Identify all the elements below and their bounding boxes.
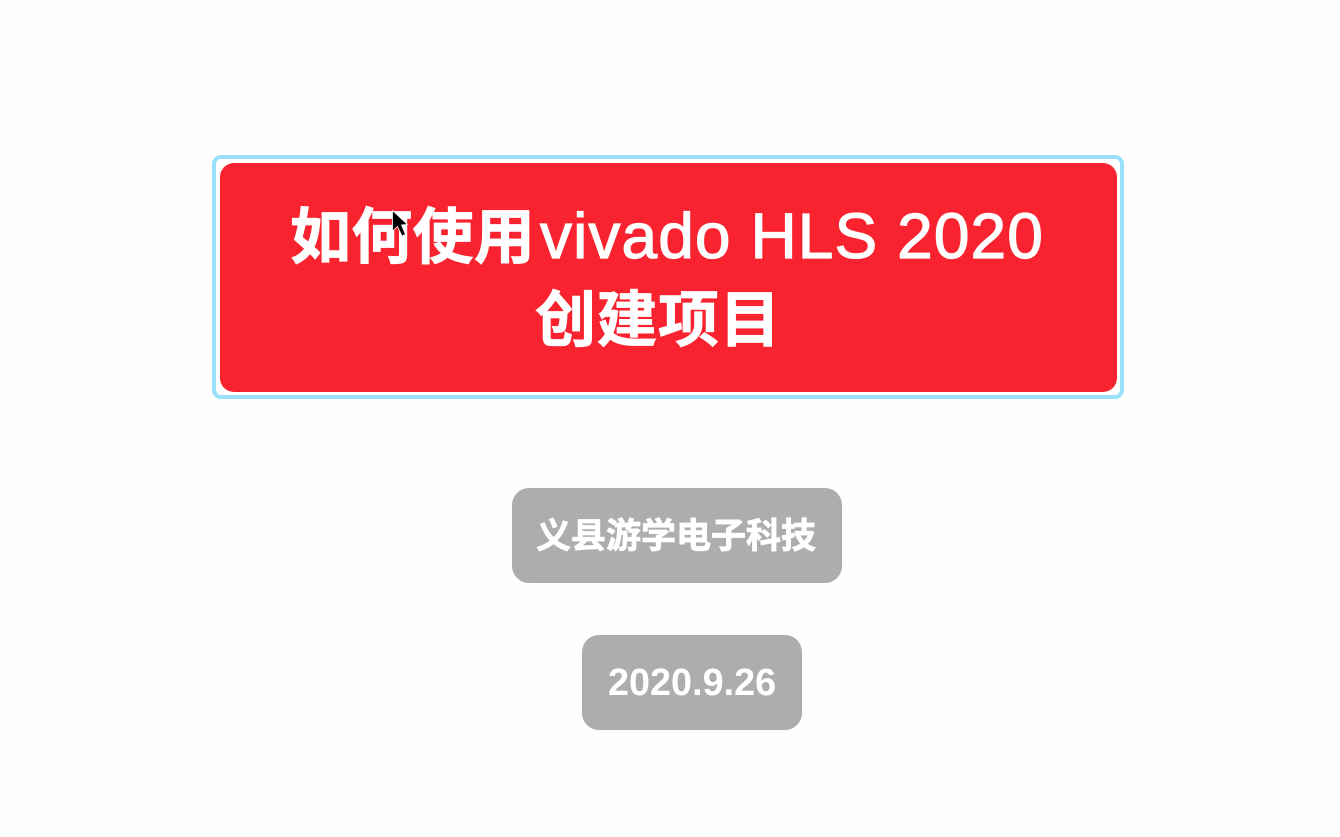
title panel: red box: [220, 163, 1117, 392]
panel: organisation name: [512, 488, 842, 583]
title line 1 Latin text: vivado HLS 2020: [540, 200, 1044, 272]
title frame: light blue outline: [212, 155, 1124, 399]
title line 1 Chinese text: 如何使用: [290, 203, 535, 271]
organisation text: 义县游学电子科技: [536, 517, 816, 556]
panel: date: [582, 635, 802, 730]
title line 2: 创建项目: [535, 286, 781, 354]
date text: 2020.9.26: [608, 662, 776, 704]
icon: mouse cursor: [392, 210, 408, 236]
